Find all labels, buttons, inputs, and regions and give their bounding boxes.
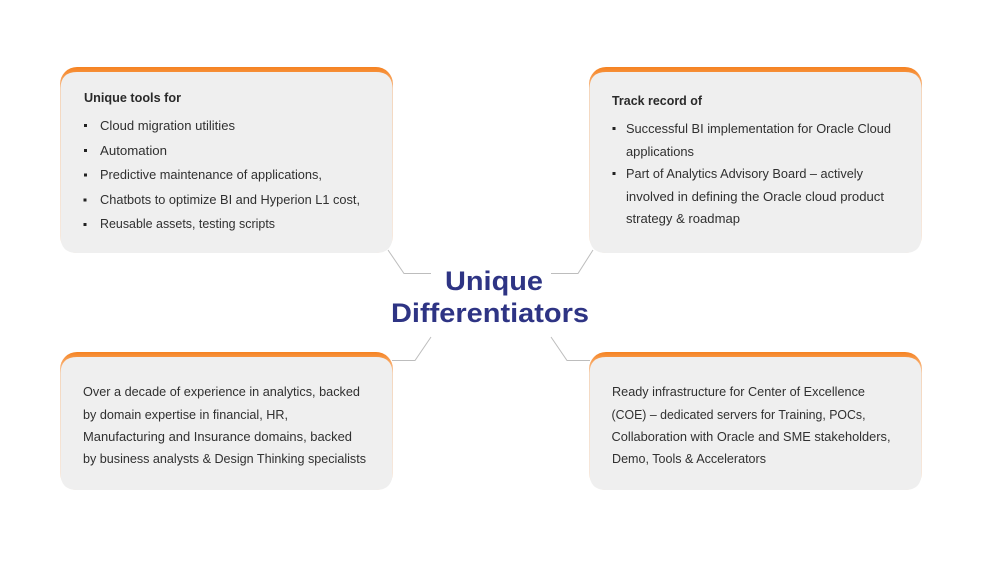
list: track record: involved in defining the Oracle cloud product: [626, 189, 884, 204]
panel: track record: [589, 67, 922, 253]
list: track record: [612, 121, 891, 226]
list: unique tools: Predictive maintenance of applications,: [100, 167, 322, 182]
text: infrastructure: Collaboration with Oracle and SME stakeholders,: [612, 429, 890, 444]
text: infrastructure: (COE) – dedicated servers for Training, POCs,: [612, 407, 866, 422]
list: track record: Part of Analytics Advisory Board – actively: [626, 166, 864, 181]
text: infrastructure: [612, 384, 890, 466]
list: track record: Successful BI implementation for Oracle Cloud: [626, 121, 891, 136]
text: infrastructure: Ready infrastructure for Center of Excellence: [612, 384, 865, 399]
title: Unique: [445, 266, 543, 296]
panel: experience: [60, 352, 393, 490]
list: track record: applications: [626, 144, 694, 159]
title: [391, 266, 589, 328]
list: unique tools: Chatbots to optimize BI and Hyperion L1 cost,: [100, 192, 360, 207]
panel: infrastructure: [589, 352, 922, 490]
list: unique tools: Cloud migration utilities: [100, 118, 235, 133]
list: unique tools: [84, 118, 360, 231]
title: Differentiators: [391, 298, 589, 328]
list: unique tools: Automation: [100, 143, 167, 158]
text: experience: by business analysts & Design Thinking specialists: [83, 451, 366, 466]
connector lines: [388, 250, 593, 360]
heading: unique tools for: Unique tools for: [84, 90, 181, 105]
text: experience: by domain expertise in financial, HR,: [83, 407, 288, 422]
heading: track record of: Track record of: [612, 93, 703, 108]
list: track record: strategy & roadmap: [626, 211, 740, 226]
text: infrastructure: Demo, Tools & Accelerators: [612, 451, 766, 466]
panel: unique tools: [60, 67, 393, 253]
text: experience: Over a decade of experience in analytics, backed: [83, 384, 360, 399]
text: experience: [83, 384, 366, 466]
text: experience: Manufacturing and Insurance domains, backed: [83, 429, 352, 444]
list: unique tools: Reusable assets, testing scripts: [100, 216, 275, 231]
